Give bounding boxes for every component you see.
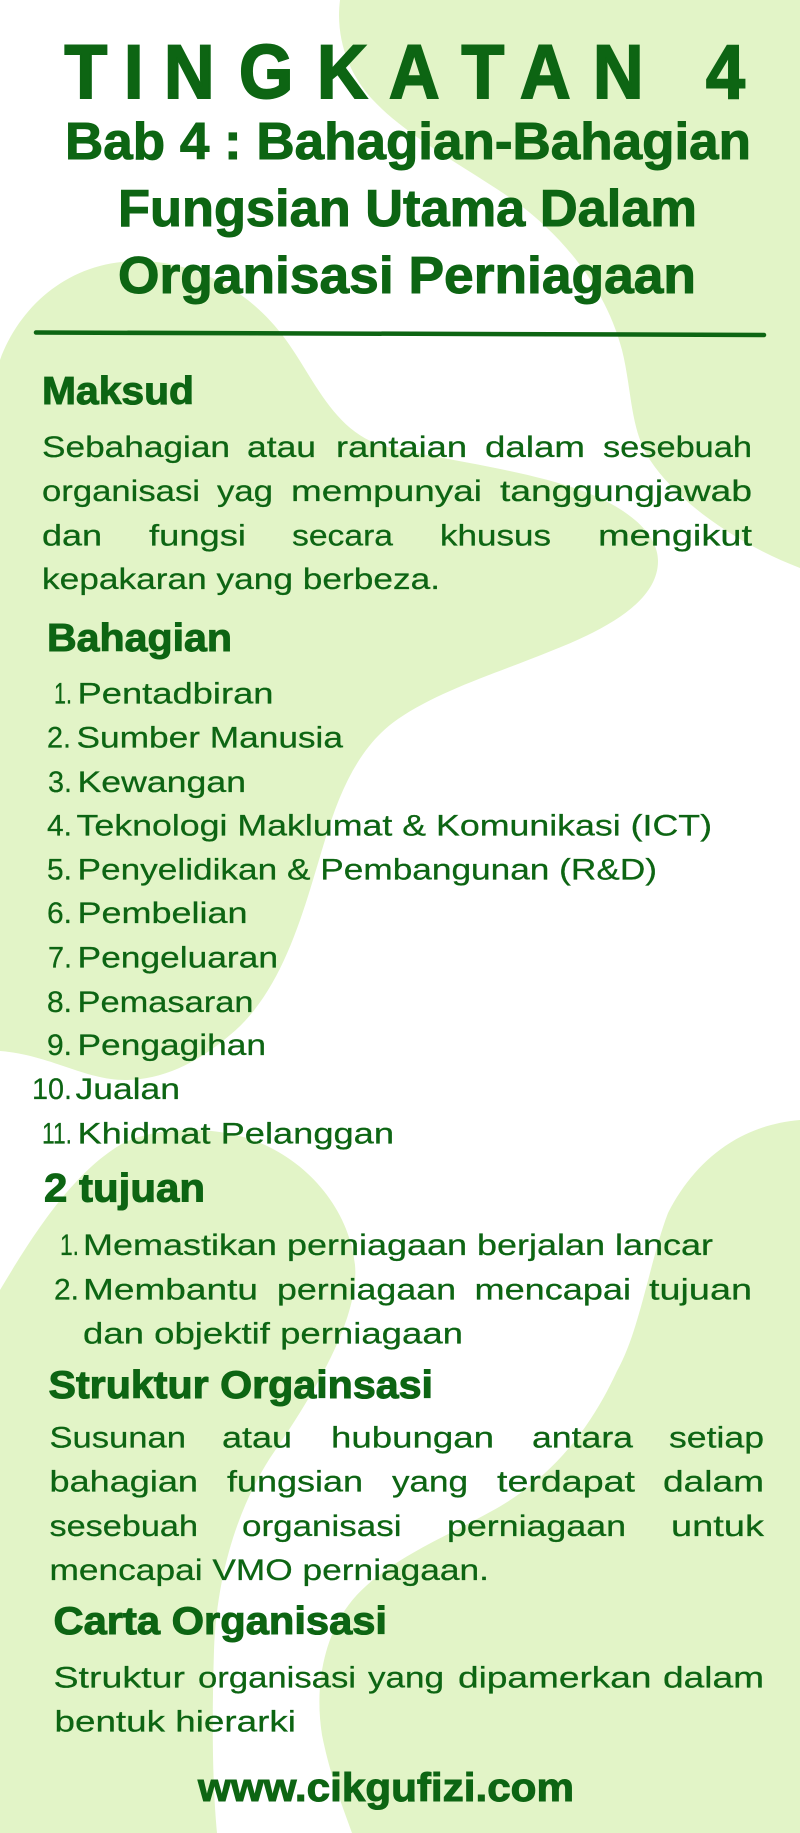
text block: Maksud definition: rantaian	[336, 431, 467, 464]
section: Carta Organisasi	[54, 1600, 764, 1739]
text block: structure definition: hubungan	[331, 1421, 494, 1454]
list: two objectives: Memastikan perniagaan berjalan lancar	[83, 1229, 713, 1262]
section: 2 tujuan	[44, 1167, 752, 1350]
list: two objectives: perniagaan	[277, 1274, 456, 1307]
list: functional departments: 9.	[47, 1029, 72, 1062]
text block: structure definition: setiap	[669, 1421, 764, 1454]
list: two objectives: 2.	[54, 1274, 79, 1307]
section: Bahagian	[32, 617, 712, 1150]
list: two objectives: dan objektif perniagaan	[83, 1317, 463, 1350]
list: functional departments: 5.	[47, 853, 72, 886]
text block: chart definition: bentuk hierarki	[54, 1706, 296, 1739]
text block: structure definition: fungsian	[227, 1466, 363, 1499]
heading: 2 tujuan: 2 tujuan	[44, 1167, 205, 1211]
text block: structure definition: yang	[392, 1466, 468, 1499]
text block: structure definition: bahagian	[50, 1466, 198, 1499]
text block: chart definition: dipamerkan	[458, 1661, 652, 1694]
list: functional departments: 11.	[42, 1118, 72, 1150]
list: functional departments: Teknologi Maklumat & Komunikasi (ICT)	[76, 810, 712, 843]
text block: structure definition	[50, 1421, 765, 1587]
section: Maksud	[42, 370, 753, 596]
text block: chart definition: dalam	[663, 1661, 764, 1694]
list: functional departments: Pembelian	[78, 897, 248, 930]
list: functional departments: 7.	[48, 942, 72, 975]
list: functional departments: Jualan	[76, 1073, 180, 1106]
subtitle: chapter heading: Bab 4 : Bahagian-Bahagian	[65, 113, 751, 171]
text block: chart definition: yang	[368, 1661, 444, 1694]
list: two objectives: tujuan	[649, 1274, 752, 1307]
text block: Maksud definition: secara	[292, 520, 393, 552]
text block: structure definition: Susunan	[50, 1421, 186, 1454]
text block: structure definition: terdapat	[497, 1466, 636, 1499]
list: functional departments: Pengeluaran	[78, 942, 278, 975]
heading: Bahagian: Bahagian	[47, 617, 232, 660]
subtitle: chapter heading	[65, 113, 751, 305]
text block: structure definition: perniagaan	[447, 1510, 626, 1543]
list: two objectives: Membantu	[83, 1274, 258, 1307]
list: functional departments: 1.	[54, 678, 72, 711]
text block: structure definition: organisasi	[242, 1510, 402, 1543]
text block: Maksud definition: kepakaran yang berbeza.	[42, 563, 440, 596]
text block: Maksud definition	[42, 431, 753, 596]
text block: Maksud definition: khusus	[440, 520, 551, 552]
list: functional departments: Khidmat Pelanggan	[78, 1118, 394, 1150]
divider rule	[36, 332, 764, 335]
subtitle: chapter heading: Organisasi Perniagaan	[118, 247, 696, 305]
text block: chart definition: Struktur	[54, 1661, 185, 1694]
text block: Maksud definition: yag	[217, 475, 273, 508]
list: two objectives: mencapai	[474, 1274, 631, 1307]
heading: Struktur Orgainsasi: Struktur Orgainsasi	[48, 1364, 433, 1407]
section: Struktur Organisasi	[48, 1364, 765, 1587]
text block: Maksud definition: mempunyai	[291, 475, 482, 508]
text block: structure definition: sesebuah	[50, 1510, 198, 1543]
text block: structure definition: atau	[222, 1421, 292, 1454]
text block: Maksud definition: mengikut	[598, 520, 753, 552]
text block: chart definition	[54, 1661, 764, 1739]
heading: Carta Organisasi: Carta Organisasi	[54, 1600, 387, 1643]
list: functional departments: 8.	[47, 986, 72, 1019]
list: functional departments: Kewangan	[78, 766, 246, 799]
list: functional departments: 3.	[48, 766, 72, 799]
list: functional departments: Pengagihan	[78, 1029, 266, 1062]
heading: Maksud: Maksud	[42, 370, 194, 413]
text block: structure definition: dalam	[663, 1466, 764, 1499]
list: functional departments	[32, 678, 712, 1150]
list: functional departments: 6.	[47, 897, 72, 930]
list: two objectives: 1.	[60, 1229, 79, 1262]
text block: Maksud definition: sesebuah	[603, 431, 752, 464]
text block: Maksud definition: fungsi	[149, 520, 246, 552]
list: functional departments: 2.	[47, 721, 71, 754]
title: Tingkatan 4: TINGKATAN 4	[64, 30, 755, 115]
footer: website: www.cikgufizi.com	[197, 1766, 574, 1810]
subtitle: chapter heading: Fungsian Utama Dalam	[118, 180, 697, 238]
text block: chart definition: organisasi	[198, 1661, 356, 1694]
text block: Maksud definition: tanggungjawab	[500, 475, 752, 508]
list: two objectives	[54, 1229, 752, 1350]
text block: structure definition: untuk	[671, 1510, 765, 1543]
text block: structure definition: mencapai VMO perniagaan.	[50, 1554, 489, 1587]
text block: Maksud definition: dan	[42, 520, 102, 552]
text block: Maksud definition: organisasi	[42, 475, 200, 508]
list: functional departments: Pemasaran	[78, 986, 254, 1019]
text block: Maksud definition: atau	[247, 431, 316, 464]
list: functional departments: Pentadbiran	[78, 678, 274, 711]
text block: structure definition: antara	[532, 1421, 633, 1454]
list: functional departments: Sumber Manusia	[76, 721, 343, 754]
list: functional departments: 10.	[32, 1073, 72, 1106]
text block: Maksud definition: dalam	[485, 431, 585, 464]
list: functional departments: Penyelidikan & Pembangunan (R&D)	[78, 853, 657, 886]
list: functional departments: 4.	[47, 810, 72, 843]
text block: Maksud definition: Sebahagian	[42, 431, 230, 464]
